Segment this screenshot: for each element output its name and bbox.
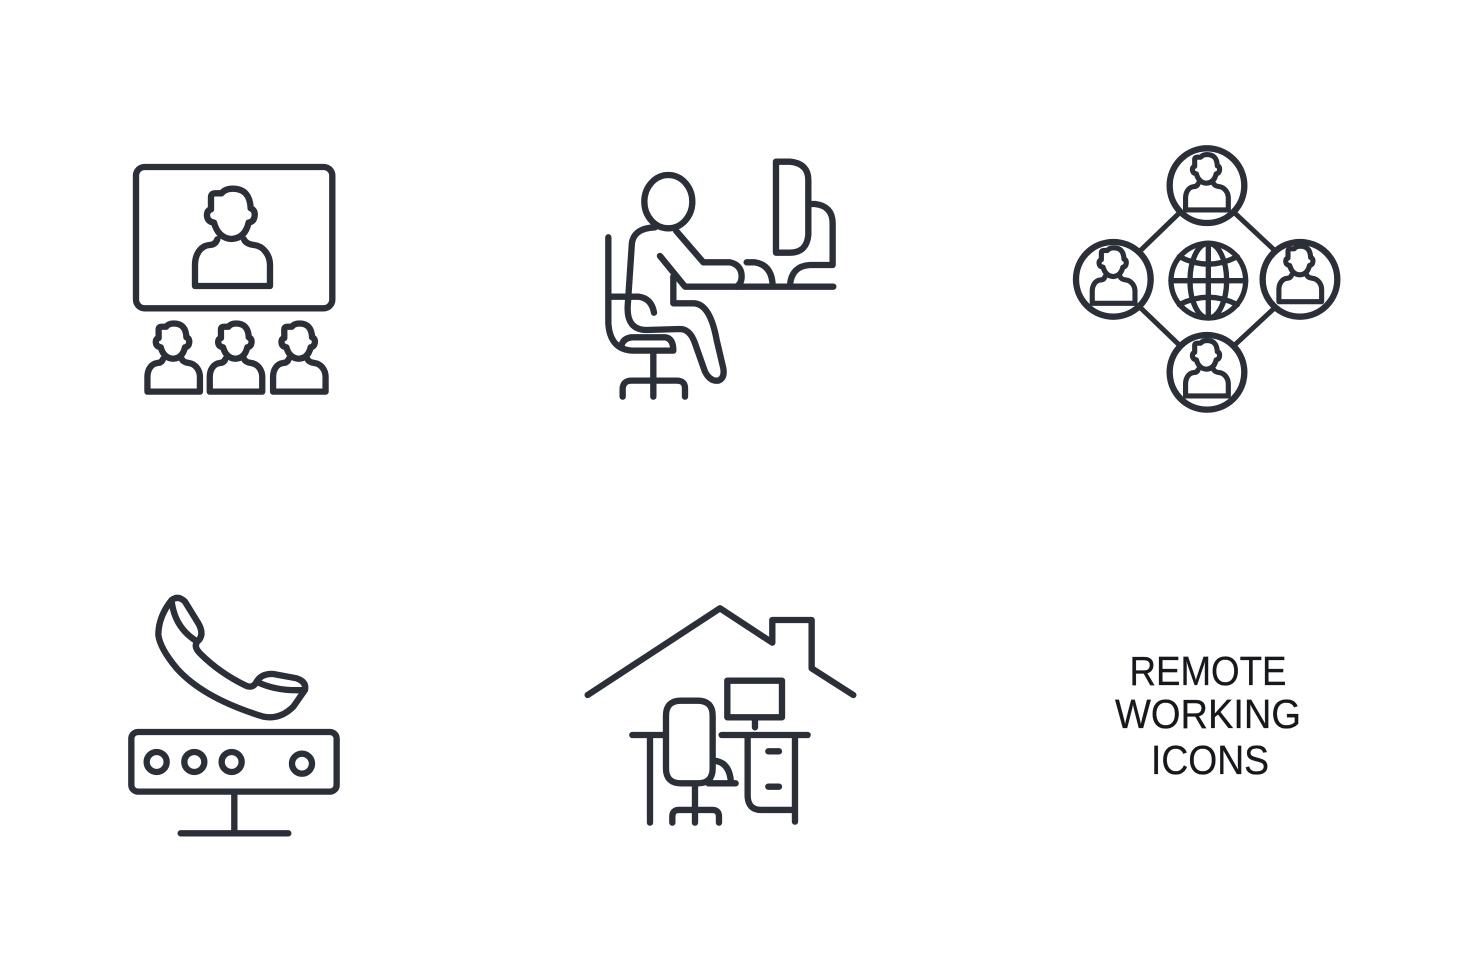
monitor screen — [136, 167, 332, 308]
desktop monitor — [727, 681, 782, 727]
desk top and forearm line — [660, 256, 833, 287]
mouse — [747, 262, 773, 285]
office chair — [608, 237, 685, 397]
phone base unit — [131, 732, 337, 792]
title text: ICONS — [1151, 737, 1269, 783]
title text: WORKING — [1115, 691, 1301, 737]
icon: conference phone — [131, 598, 337, 833]
house roof with chimney — [588, 608, 853, 695]
connector lines — [1139, 212, 1276, 346]
body and legs — [628, 227, 724, 381]
presenter on screen — [195, 189, 270, 286]
icon: home office — [588, 608, 853, 823]
audience person 2 — [210, 324, 262, 392]
arm — [676, 231, 742, 287]
telephone handset — [158, 598, 305, 717]
icon: video conference — [136, 167, 332, 392]
title text — [1115, 648, 1301, 783]
globe — [1171, 243, 1246, 318]
monitor stand — [790, 204, 833, 285]
icon: person working at desk — [608, 162, 833, 397]
node: left person — [1076, 242, 1151, 317]
title text: REMOTE — [1130, 648, 1286, 694]
icon: global team network — [1076, 148, 1337, 410]
audience person 1 — [147, 324, 200, 392]
computer monitor — [776, 162, 808, 253]
buttons — [147, 752, 312, 774]
audience person 3 — [273, 324, 326, 392]
desk — [632, 735, 808, 823]
head — [644, 175, 692, 228]
node: right person — [1263, 242, 1337, 317]
node: top person — [1170, 148, 1244, 223]
node: bottom person — [1170, 335, 1244, 410]
desk chair — [666, 701, 736, 823]
stand — [181, 792, 288, 833]
